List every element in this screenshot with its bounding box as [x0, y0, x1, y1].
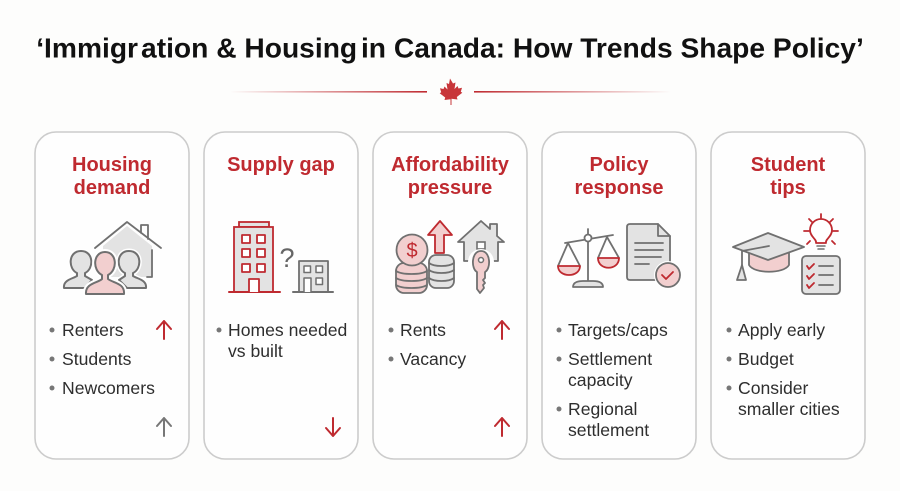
heading: housing demand: Housing	[72, 154, 152, 176]
panel: policy response	[542, 132, 696, 459]
icon: graduation cap, bulb and checklist	[733, 214, 840, 294]
icon: buildings: ?	[279, 243, 295, 273]
list: Renters	[62, 320, 124, 340]
list	[726, 320, 840, 419]
heading: policy response: response	[575, 177, 663, 199]
title: ‘Immigration & Housing in Canada: How Trends Shape Policy’	[36, 32, 864, 64]
panel: supply gap	[204, 132, 358, 459]
list: Newcomers	[62, 378, 155, 398]
panel: student tips	[711, 132, 865, 459]
heading: policy response: Policy	[590, 154, 649, 176]
panel: housing demand	[35, 132, 189, 459]
icon: people and house	[64, 222, 161, 294]
heading: supply gap: Supply gap	[227, 154, 335, 176]
divider with maple leaf	[230, 78, 671, 105]
list: Regional	[568, 399, 637, 419]
heading: housing demand: demand	[74, 177, 150, 199]
arrow: up red	[495, 321, 509, 339]
heading: affordability pressure: pressure	[408, 177, 492, 199]
arrow: down red	[326, 418, 340, 436]
icon: coins, arrow, house and key	[396, 221, 504, 293]
list: Consider	[738, 378, 809, 398]
list: Targets/caps	[568, 320, 668, 340]
list: Apply early	[738, 320, 825, 340]
list: smaller cities	[738, 399, 840, 419]
list: capacity	[568, 370, 633, 390]
list	[216, 320, 347, 361]
list: Homes needed	[228, 320, 347, 340]
panel: affordability pressure	[373, 132, 527, 459]
list: Budget	[738, 349, 794, 369]
list	[50, 320, 155, 398]
heading: student tips: Student	[751, 154, 826, 176]
arrow: up red	[495, 418, 509, 436]
arrow: up red	[157, 321, 171, 339]
icon: scales and document	[558, 224, 682, 289]
icon: coins, arrow, house and key: $	[406, 240, 418, 262]
list: vs built	[228, 341, 283, 361]
icon: buildings	[229, 222, 333, 292]
arrow: up grey	[157, 418, 171, 436]
list: Vacancy	[400, 349, 466, 369]
list: Students	[62, 349, 132, 369]
list	[388, 320, 466, 369]
heading: student tips: tips	[770, 177, 806, 199]
list	[556, 320, 668, 440]
icon: maple leaf	[440, 78, 462, 105]
heading: affordability pressure: Affordability	[391, 154, 510, 176]
list: settlement	[568, 420, 649, 440]
list: Settlement	[568, 349, 652, 369]
list: Rents	[400, 320, 446, 340]
